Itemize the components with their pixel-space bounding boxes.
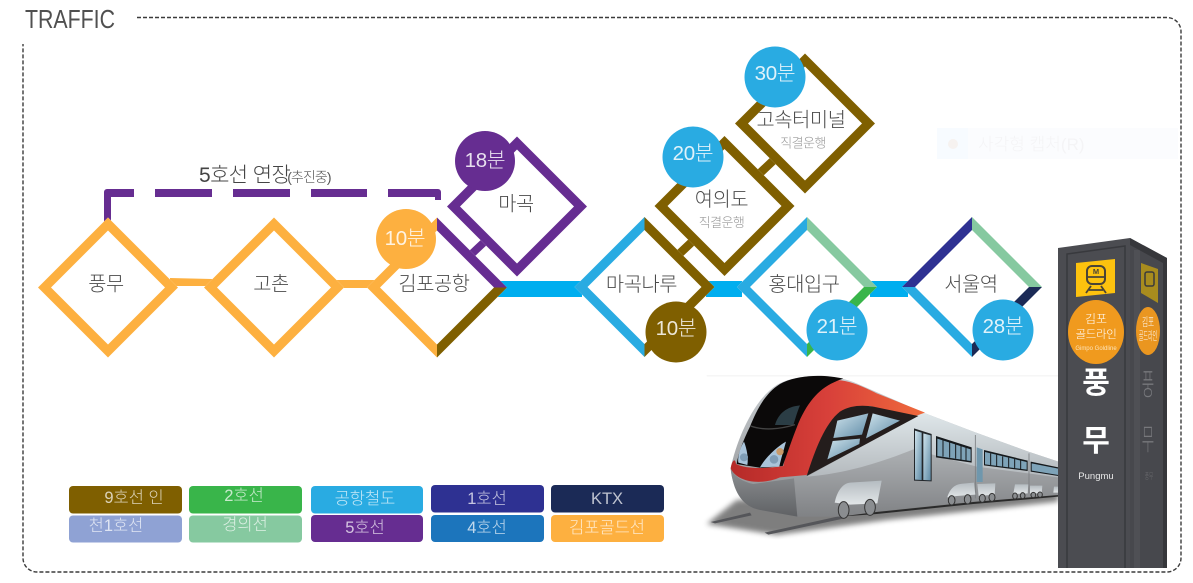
station: Yeouido: 여의도: [695, 189, 748, 211]
station: Magok: [447, 136, 587, 276]
time badge: Hongik Univ 21 min: [806, 300, 868, 360]
icon: metro sign front: [1076, 259, 1115, 297]
legend item: Gimpo Goldline: 김포골드선: [569, 518, 645, 537]
station: Seoul Station: 서울역: [944, 274, 998, 296]
legend item: line 5: [311, 515, 423, 542]
legend item: Gyeongui line: 경의선: [222, 515, 268, 534]
side face sign: 골드라인: [1139, 330, 1157, 343]
station name front: 풍: [1082, 367, 1110, 400]
faint capture tooltip ghost: 사각형 캡처(R): [978, 135, 1085, 154]
station: Gimpo Airport: 김포공항: [398, 274, 470, 296]
station name front: 무: [1082, 425, 1110, 458]
route line connectors: [170, 278, 908, 297]
station: Pungmu: 풍무: [88, 274, 124, 296]
legend item: airport railroad: [311, 486, 423, 514]
station: Express Bus Terminal: 고속터미널: [756, 110, 846, 132]
station: Seoul Station: [902, 217, 1042, 357]
station: Express Bus Terminal: 직결운행: [780, 136, 826, 150]
legend item: KTX: KTX: [591, 490, 623, 508]
station: Magongnaru: 마곡나루: [606, 274, 677, 296]
time badge: Express Bus Terminal 30 min: [744, 46, 806, 108]
badge: Gimpo Goldline front: 골드라인: [1075, 328, 1117, 341]
station: Pungmu: [38, 218, 178, 358]
station name front: [1078, 367, 1114, 482]
legend item: Gimpo Goldline: [551, 515, 664, 542]
station: Gochon: [204, 218, 344, 358]
station: Express Bus Terminal: [735, 54, 875, 194]
station: Yeouido: [654, 136, 794, 276]
side face sign: 풍: [1142, 368, 1154, 401]
station: Magok: 마곡: [498, 194, 534, 216]
side face sign: 무: [1142, 423, 1154, 456]
side face sign: 풍무: [1145, 472, 1153, 481]
time badge: Yeouido 20 min: [662, 126, 724, 188]
time badge: Hongik Univ 21 min: 21분: [817, 315, 857, 338]
badge: Gimpo Goldline front: [1068, 300, 1124, 364]
side face sign: [1136, 263, 1160, 481]
transfer link connectors: [468, 154, 780, 259]
label: line 5 extension: 5호선 연장(추진중): [199, 164, 331, 187]
time badge: Magongnaru 10 min: [646, 302, 706, 362]
station: Hongik Univ: [737, 217, 877, 357]
legend item: airport railroad: 공항철도: [335, 489, 395, 508]
title: TRAFFIC: [25, 4, 115, 34]
faint capture tooltip ghost: [937, 128, 1178, 159]
legend item: Incheon line 1: [69, 516, 182, 542]
station sign post: [1058, 238, 1167, 568]
badge: Gimpo Goldline front: Gimpo Goldline: [1075, 346, 1117, 352]
legend item: KTX: [551, 485, 664, 512]
legend item: Incheon line 1: 천1호선: [89, 516, 143, 535]
legend item: line 4: [431, 515, 544, 542]
station: Hongik Univ: 홍대입구: [768, 274, 840, 296]
time badge: Magok 18 min: [455, 131, 515, 191]
time badge: Magok 18 min: 18분: [465, 149, 505, 172]
station: Gochon: 고촌: [253, 274, 289, 296]
dashed line: line 5 extension: [104, 189, 441, 225]
station: Gimpo Airport: [367, 218, 507, 358]
train illustration: [707, 375, 1058, 535]
badge: Gimpo Goldline front: 김포: [1085, 312, 1107, 326]
legend item: line 5: 5호선: [345, 518, 385, 537]
legend item: line 4: 4호선: [467, 518, 507, 537]
legend item: Gyeongui line: [189, 515, 302, 542]
legend item: line 2: [189, 486, 302, 514]
time badge: Magongnaru 10 min: 10분: [656, 317, 696, 340]
legend item: line 2: 2호선: [224, 486, 264, 505]
legend item: line 1: 1호선: [467, 489, 507, 508]
time badge: Seoul Station 28 min: 28분: [983, 315, 1023, 338]
time badge: Gimpo Airport 10 min: [376, 209, 436, 269]
station: Yeouido: 직결운행: [699, 215, 744, 230]
legend item: line 9: [69, 486, 182, 514]
station name front: Pungmu: [1078, 471, 1114, 482]
legend: [69, 485, 664, 542]
time badge: Yeouido 20 min: 20분: [673, 142, 713, 165]
time badge: Seoul Station 28 min: [972, 300, 1034, 360]
time badge: Express Bus Terminal 30 min: 30분: [755, 62, 795, 85]
time badge: Gimpo Airport 10 min: 10분: [385, 227, 425, 250]
side face sign: 김포: [1142, 315, 1154, 330]
legend item: line 1: [431, 485, 544, 512]
icon: metro sign front: M: [1093, 267, 1099, 276]
legend item: line 9: 9호선 인: [104, 488, 164, 507]
station: Magongnaru: [574, 217, 714, 357]
